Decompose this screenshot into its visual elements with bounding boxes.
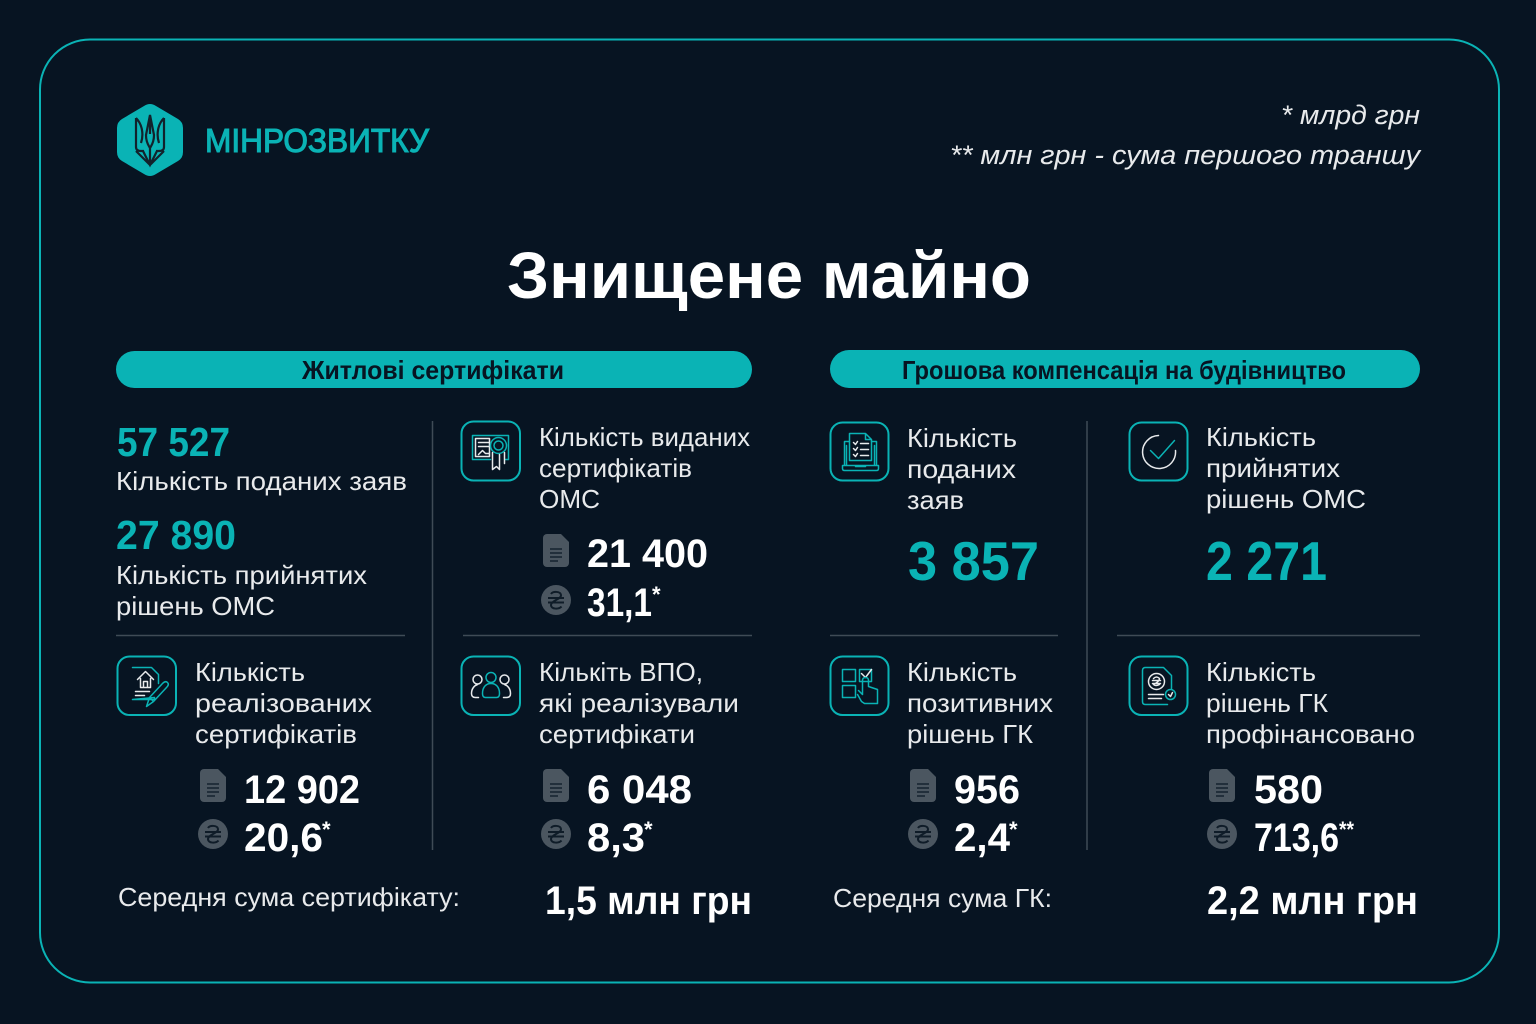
- logo: Мінрозвитку: [117, 104, 430, 176]
- icon: selection with hand: [830, 656, 888, 715]
- block: positive decisions: [830, 656, 1053, 860]
- icon: people: [462, 656, 520, 715]
- number of certificates: 21 400: [587, 532, 708, 576]
- icon: document: [543, 769, 569, 802]
- label: [539, 422, 750, 514]
- label: профінансовано: [1206, 719, 1415, 749]
- label: поданих: [907, 454, 1016, 484]
- block: financed decisions: [1130, 656, 1415, 860]
- icon: laptop with checklist: [830, 422, 888, 480]
- stat: applications submitted: [116, 419, 407, 496]
- logo wordmark: МІНРОЗВИТКУ: [205, 122, 430, 159]
- label: позитивних: [907, 688, 1053, 718]
- icon: hexagon with trident: [117, 104, 183, 176]
- block: realized certificates: [118, 656, 372, 860]
- number: 956: [954, 768, 1020, 812]
- label: [195, 657, 372, 749]
- section header: housing certificates: Житлові сертифікати: [301, 355, 564, 385]
- stat: accepted decisions: 27 890: [116, 512, 236, 558]
- average compensation label: Середня сума ГК:: [833, 883, 1052, 913]
- stat: applications submitted: Кількість поданих заяв: [116, 466, 407, 496]
- icon: circled check: [1130, 422, 1188, 480]
- block: IDPs who realized certificates: [462, 656, 739, 860]
- stat: accepted decisions: Кількість прийнятих: [116, 560, 367, 590]
- label: рішень ГК: [907, 719, 1033, 749]
- number of certificates: 12 902: [244, 768, 360, 812]
- label: [1206, 657, 1415, 749]
- label: Кількість: [195, 657, 305, 687]
- stat: accepted decisions: рішень ОМС: [116, 591, 275, 621]
- average certificate value: 1,5 млн грн: [545, 879, 752, 923]
- label: Кількіть ВПО,: [539, 657, 703, 687]
- label: рішень ОМС: [1206, 484, 1366, 514]
- asterisk: *: [652, 582, 661, 607]
- label: Кількість: [907, 657, 1017, 687]
- stat: accepted decisions: [116, 512, 367, 621]
- asterisks: **: [1339, 817, 1354, 842]
- label: заяв: [907, 485, 964, 515]
- label: сертифікатів: [539, 453, 692, 483]
- average compensation value: 2,2 млн грн: [1207, 879, 1418, 923]
- amount: 2,4: [954, 816, 1011, 860]
- amount: 8,3: [587, 816, 645, 860]
- icon: document: [200, 769, 226, 802]
- icon: hryvnia document: [1130, 656, 1188, 715]
- label: Кількість виданих: [539, 422, 750, 452]
- number: 580: [1254, 768, 1323, 812]
- block: accepted decisions, compensation: [1130, 422, 1366, 592]
- block: applications submitted, compensation: [830, 422, 1039, 592]
- icon: hryvnia: [541, 585, 571, 615]
- icon: document: [1209, 769, 1235, 802]
- icon: house document and pen: [118, 656, 176, 715]
- icon: hryvnia: [198, 819, 228, 849]
- icon: hryvnia: [908, 819, 938, 849]
- label: Кількість: [1206, 422, 1316, 452]
- asterisk: *: [322, 817, 331, 842]
- amount: 20,6: [244, 816, 323, 860]
- icon: document: [910, 769, 936, 802]
- average certificate label: Середня сума сертифікату:: [118, 882, 460, 912]
- amount: 31,1: [587, 581, 652, 625]
- section header: housing certificates: [116, 351, 752, 388]
- label: [539, 657, 739, 749]
- amount: 713,6: [1254, 816, 1339, 860]
- label: прийнятих: [1206, 453, 1340, 483]
- icon: certificate: [462, 422, 520, 480]
- label: [1206, 422, 1366, 514]
- label: сертифікати: [539, 719, 695, 749]
- label: які реалізували: [539, 688, 739, 718]
- section header: construction compensation: Грошова компенсація на будівництво: [902, 355, 1346, 385]
- label: Кількість: [907, 423, 1017, 453]
- icon: document: [543, 534, 569, 567]
- block: issued certificates: [462, 422, 750, 625]
- footnote: billions: * млрд грн: [1281, 100, 1420, 130]
- footnote: millions: ** млн грн - сума першого траншу: [950, 140, 1422, 170]
- label: рішень ГК: [1206, 688, 1328, 718]
- label: [907, 657, 1053, 749]
- stat: applications submitted: 57 527: [117, 419, 230, 465]
- title: Знищене майно: [507, 238, 1031, 312]
- section header: construction compensation: [830, 350, 1420, 388]
- value: 3 857: [908, 530, 1039, 592]
- label: реалізованих: [195, 688, 372, 718]
- asterisk: *: [1009, 817, 1018, 842]
- asterisk: *: [644, 817, 653, 842]
- number: 6 048: [587, 768, 692, 812]
- label: ОМС: [539, 484, 600, 514]
- label: Кількість: [1206, 657, 1316, 687]
- value: 2 271: [1206, 530, 1327, 592]
- icon: hryvnia: [1207, 819, 1237, 849]
- label: [907, 423, 1017, 515]
- label: сертифікатів: [195, 719, 357, 749]
- icon: hryvnia: [541, 819, 571, 849]
